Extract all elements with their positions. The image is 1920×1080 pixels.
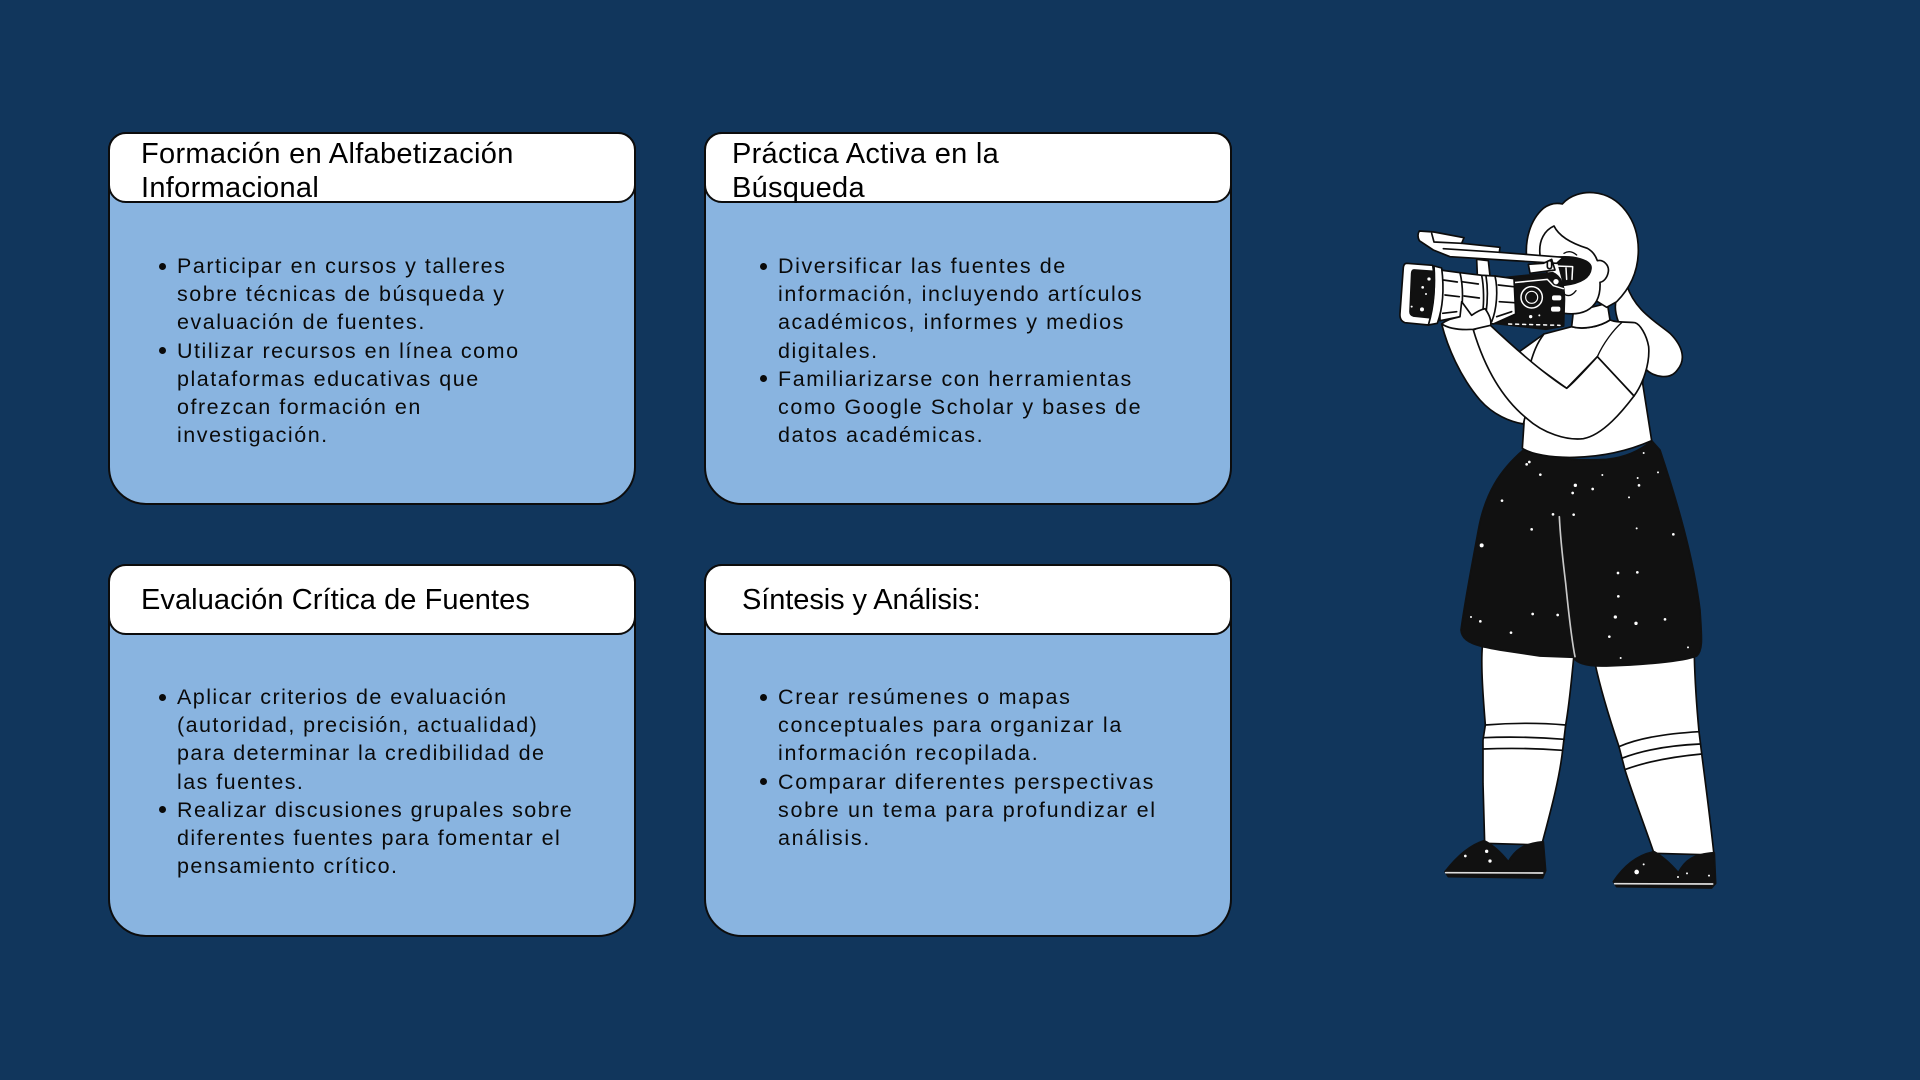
- text block: bullets panel 1: evaluación de fuentes.: [177, 310, 426, 334]
- viewfinder eyepiece: [1557, 257, 1591, 285]
- left shoe: [1445, 841, 1546, 878]
- lens barrel: [1440, 270, 1516, 324]
- text block: bullets panel 3: las fuentes.: [177, 770, 304, 794]
- text block: bullets panel 4: análisis.: [778, 826, 871, 850]
- hair: [1526, 192, 1638, 307]
- text block: bullets panel 2: Familiarizarse con herramientas: [778, 367, 1133, 391]
- panel: Evaluación Crítica de Fuentes: [108, 564, 636, 937]
- lens hood ring: [1428, 266, 1443, 325]
- heading: Síntesis y Análisis: Síntesis y Análisis:: [742, 584, 981, 616]
- upper body: hair, arms, torso and camera: [1400, 192, 1682, 457]
- text block: bullets panel 2: académicos, informes y medios: [778, 310, 1125, 334]
- text block: bullets panel 4: sobre un tema para profundizar el: [778, 798, 1157, 822]
- heading: Práctica Activa en la Búsqueda: Búsqueda: [732, 172, 865, 204]
- text block: bullets panel 2: datos académicas.: [778, 423, 984, 447]
- lower body: skirt, legs and shoes: [1445, 441, 1716, 888]
- neck: [1572, 303, 1610, 328]
- text block: bullets panel 1: Utilizar recursos en línea como: [177, 339, 520, 363]
- text block: bullets panel 4: Comparar diferentes perspectivas: [778, 770, 1155, 794]
- text block: bullets panel 2: como Google Scholar y bases de: [778, 395, 1142, 419]
- handle support: [1477, 259, 1490, 276]
- sleeve cuff left: [1519, 352, 1531, 362]
- text block: bullets panel 1: [159, 254, 520, 447]
- panel: Formación en Alfabetización Informacional: [108, 132, 636, 505]
- heading: Formación en Alfabetización Informacional: Informacional: [141, 172, 319, 204]
- text block: bullets panel 3: pensamiento crítico.: [177, 854, 398, 878]
- text block: bullets panel 2: información, incluyendo artículos: [778, 282, 1143, 306]
- right leg: [1595, 657, 1714, 855]
- text block: bullets panel 4: [760, 685, 1157, 850]
- text block: bullets panel 3: Realizar discusiones grupales sobre: [177, 798, 573, 822]
- ponytail: [1615, 285, 1682, 377]
- heading: Práctica Activa en la Búsqueda: [704, 132, 1232, 203]
- panel: Práctica Activa en la Búsqueda: [704, 132, 1232, 505]
- text block: bullets panel 4: conceptuales para organizar la: [778, 713, 1123, 737]
- heading: Evaluación Crítica de Fuentes: Evaluación Crítica de Fuentes: [141, 584, 530, 616]
- text block: bullets panel 3: diferentes fuentes para fomentar el: [177, 826, 561, 850]
- skirt: [1461, 441, 1701, 666]
- text block: bullets panel 2: Diversificar las fuentes de: [778, 254, 1067, 278]
- face: [1540, 226, 1608, 314]
- heading: Formación en Alfabetización Informacional: [108, 132, 636, 203]
- camera body: [1493, 273, 1564, 329]
- top handle: [1418, 231, 1563, 263]
- text block: bullets panel 3: [159, 685, 573, 878]
- text block: bullets panel 2: [760, 254, 1143, 447]
- text block: bullets panel 1: investigación.: [177, 423, 329, 447]
- torso: [1519, 323, 1652, 457]
- text block: bullets panel 3: para determinar la credibilidad de: [177, 741, 545, 765]
- skirt seam: [1559, 517, 1575, 657]
- right shoe: [1613, 852, 1716, 888]
- text block: bullets panel 1: plataformas educativas que: [177, 367, 480, 391]
- left leg: [1482, 647, 1574, 845]
- text block: bullets panel 1: Participar en cursos y talleres: [177, 254, 506, 278]
- heading: Práctica Activa en la Búsqueda: Práctica Activa en la: [732, 138, 999, 170]
- shirt shoulder and sleeve: [1531, 320, 1649, 396]
- text block: bullets panel 4: información recopilada.: [778, 741, 1039, 765]
- heading: Evaluación Crítica de Fuentes: [108, 564, 636, 635]
- back arm: [1442, 324, 1533, 424]
- heading: Formación en Alfabetización Informacional: Formación en Alfabetización: [141, 138, 514, 170]
- panel: Síntesis y Análisis: [704, 564, 1232, 937]
- text block: bullets panel 3: Aplicar criterios de evaluación: [177, 685, 508, 709]
- heading: Síntesis y Análisis: [704, 564, 1232, 635]
- skirt speckles: [1470, 452, 1689, 659]
- text block: bullets panel 1: sobre técnicas de búsqueda y: [177, 282, 506, 306]
- text block: bullets panel 1: ofrezcan formación en: [177, 395, 422, 419]
- hand holding the lens: [1442, 302, 1491, 330]
- front arm: [1473, 323, 1634, 439]
- text block: bullets panel 3: (autoridad, precisión, actualidad): [177, 713, 538, 737]
- text block: bullets panel 4: Crear resúmenes o mapas: [778, 685, 1072, 709]
- lens front: [1400, 263, 1434, 325]
- camera: [1400, 231, 1591, 329]
- text block: bullets panel 2: digitales.: [778, 339, 879, 363]
